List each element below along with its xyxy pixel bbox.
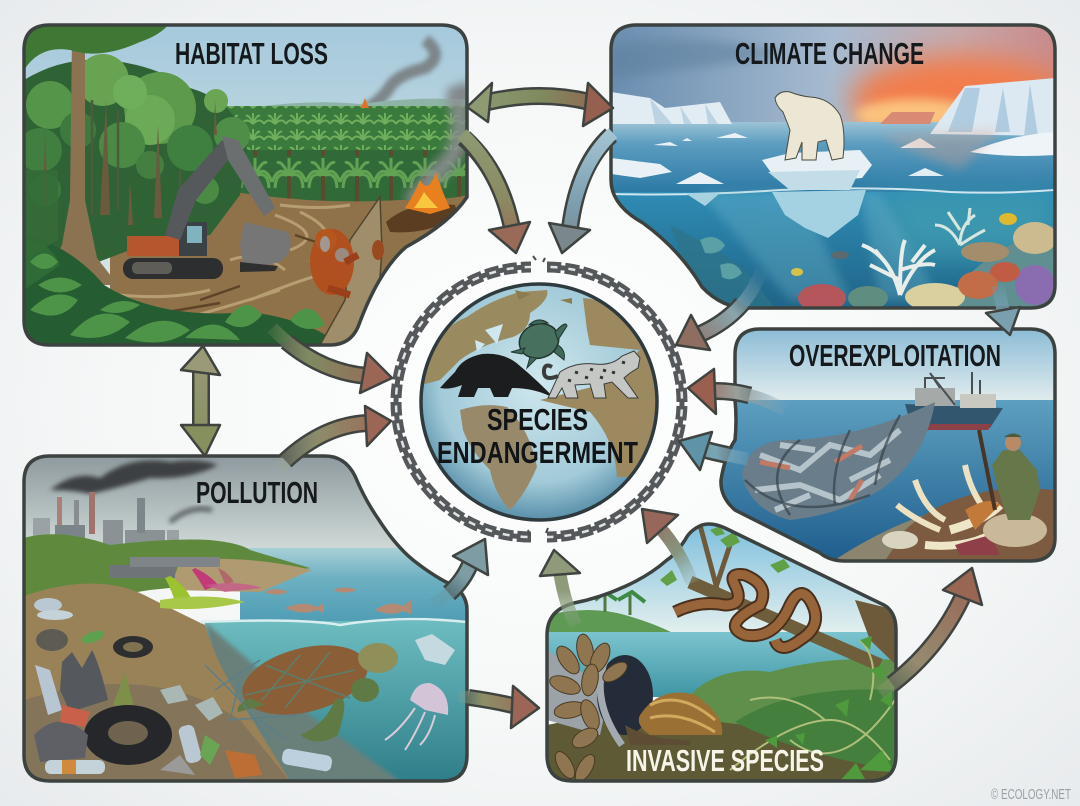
icon: snake [675,574,816,648]
icon: fishing boat [905,372,1003,430]
arrow: overexploitation lower to species endangerment [679,432,748,470]
arrow: invasive species to species endangerment [540,550,580,625]
icon: fishing net with catch [742,402,935,520]
icon: factory [33,492,179,548]
panel: invasive species [547,524,896,784]
arrow: habitat loss to species endangerment [462,134,530,253]
panel: overexploitation [720,329,1055,561]
icon: clogged pipe with mussels [547,633,653,784]
icon: poached animals and rock [833,465,1055,561]
icon: sea turtle [511,318,567,368]
arrow: climate change to overexploitation [986,285,1020,335]
icon: coral reef [670,208,1057,312]
broken chain ring [396,256,682,537]
arrow: climate change lower to species endangerment [676,270,762,350]
heading: pollution: POLLUTION [196,475,318,510]
icon: jellyfish [385,683,448,750]
icon: pipes and discharge [110,557,262,609]
icon: netted sea turtle [205,633,398,742]
arrow: invasive species upper to species endangerment [642,509,692,583]
icon: excavator [123,136,291,279]
heading: habitat loss: HABITAT LOSS [175,36,328,71]
arrow: pollution to invasive species [458,686,539,728]
arrow: climate change to species endangerment [549,133,613,253]
icon: plastic bag in water [415,634,455,665]
globe with endangered species [421,284,660,520]
icon: plastic waste and tires [34,598,333,778]
icon: creeping vines [730,636,895,781]
icon: orangutan and stump [310,195,384,344]
icon: burning pile [361,98,458,232]
icon: snow leopard [544,351,640,398]
panel: habitat loss [18,25,467,345]
arrow: habitat loss and climate change link [467,83,613,126]
panel: pollution [24,456,467,781]
icon: pangolin silhouette [440,354,554,398]
arrow: pollution lower to species endangerment [432,539,488,605]
arrow: invasive species to overexploitation [880,568,982,693]
icon: iceberg and floe [762,150,872,238]
heading: invasive species: INVASIVE SPECIES [626,743,824,778]
icon: large clam [625,692,722,745]
arrow: pollution to species endangerment [278,406,391,468]
arrow: habitat loss lower to species endangerment [272,328,392,393]
arrow: habitat loss and pollution link [181,346,220,456]
globe with endangered species: ENDANGERMENT [437,435,638,470]
panel: climate change [611,25,1070,312]
icon: hunter [979,430,1040,520]
icon: dead fish [264,588,411,614]
icon: polar bear [775,92,844,160]
arrow: overexploitation upper to species endangerment [688,369,785,414]
heading: species endangerment: SPECIES [487,402,588,437]
heading: climate change: CLIMATE CHANGE [735,36,924,71]
